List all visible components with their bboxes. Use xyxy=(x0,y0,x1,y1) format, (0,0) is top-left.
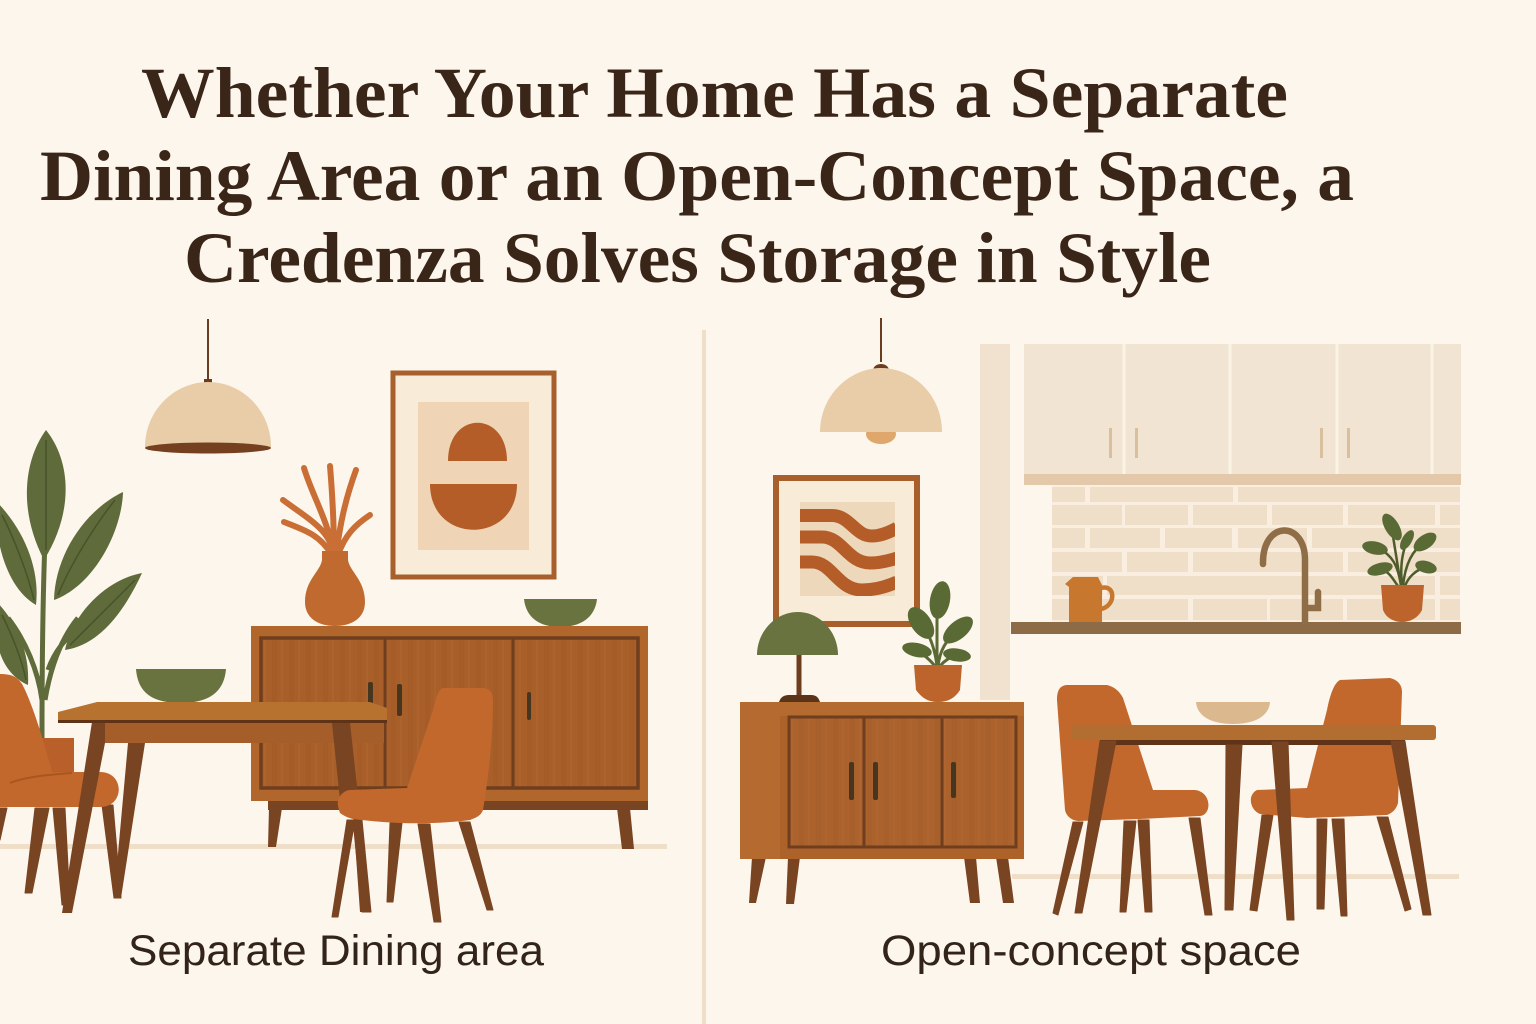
label: open-concept space: Open-concept space xyxy=(881,927,1301,975)
chair right xyxy=(1250,678,1411,916)
icon: potted plant on counter xyxy=(1361,511,1440,622)
icon: green bowl on credenza xyxy=(524,599,597,627)
panel: open-concept space xyxy=(740,318,1461,975)
title: Credenza Solves Storage in Style xyxy=(184,218,1211,298)
icon: faucet xyxy=(1263,530,1318,622)
backsplash xyxy=(1052,484,1460,622)
icon: potted plant on credenza xyxy=(901,580,978,702)
credenza xyxy=(740,702,1024,904)
icon: pendant lamp xyxy=(820,318,942,444)
dining table with bowl xyxy=(1072,702,1436,920)
title: Dining Area or an Open-Concept Space, a xyxy=(40,136,1354,216)
dining table with bowl xyxy=(58,669,387,913)
icon: pendant lamp xyxy=(145,319,271,454)
panel: separate dining area xyxy=(0,319,667,975)
title: Whether Your Home Has a Separate xyxy=(141,53,1288,133)
credenza xyxy=(251,626,648,849)
framed wall art xyxy=(393,373,554,577)
framed wall art xyxy=(776,478,917,624)
upper cabinets xyxy=(1024,344,1461,485)
icon: jug xyxy=(1065,577,1112,622)
countertop xyxy=(1011,622,1461,634)
icon: table lamp xyxy=(757,612,838,702)
chair right xyxy=(332,688,493,922)
chair left xyxy=(0,674,121,905)
chair left xyxy=(1053,685,1212,915)
title xyxy=(40,53,1354,298)
icon: plant xyxy=(0,430,142,738)
icon: vase with dried stems xyxy=(283,466,370,626)
label: separate dining area: Separate Dining area xyxy=(128,927,544,975)
